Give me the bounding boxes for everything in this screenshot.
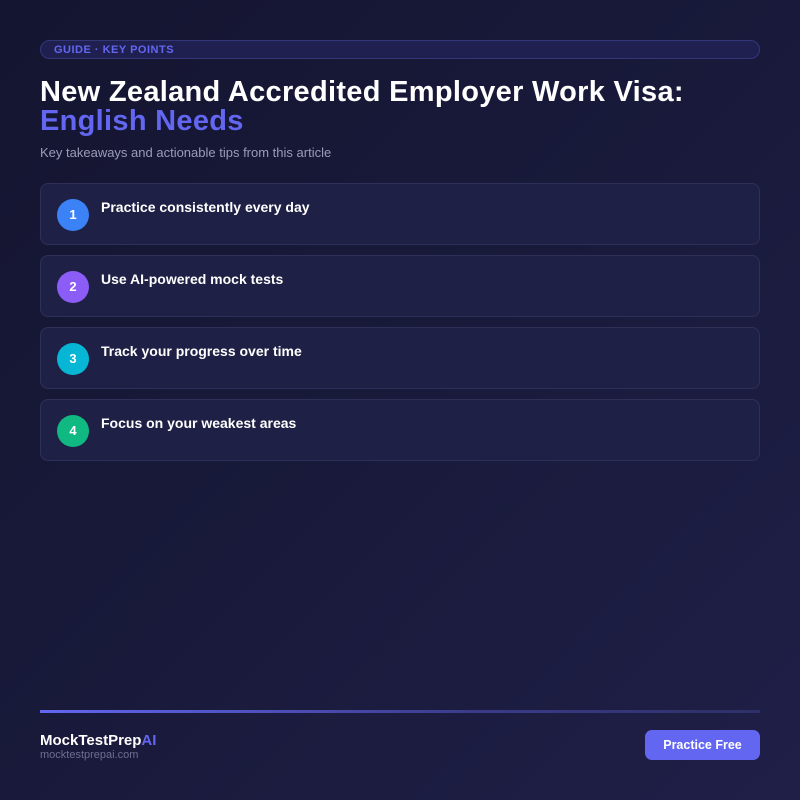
card 4: 4 [69, 423, 77, 438]
brand: MockTestPrepAI [40, 732, 156, 749]
card 2: 2 [69, 279, 77, 294]
card 1: 1 [69, 207, 77, 222]
title [40, 76, 684, 137]
url: mocktestprepai.com [40, 749, 138, 761]
card 4: Focus on your weakest areas [101, 415, 296, 431]
card 3: 3 [69, 351, 77, 366]
button [645, 730, 760, 760]
card 4 [40, 399, 760, 461]
button: Practice Free [663, 738, 742, 752]
subtitle: Key takeaways and actionable tips from this article [40, 145, 331, 160]
card 3: Track your progress over time [101, 343, 302, 359]
tag pill: GUIDE · KEY POINTS [54, 44, 174, 56]
card 3 [40, 327, 760, 389]
card 2 [40, 255, 760, 317]
card 1: Practice consistently every day [101, 199, 310, 215]
title: New Zealand Accredited Employer Work Visa: [40, 76, 684, 108]
tag pill [40, 40, 760, 59]
card 1 [40, 183, 760, 245]
title: English Needs [40, 105, 244, 137]
card 2: Use AI-powered mock tests [101, 271, 283, 287]
